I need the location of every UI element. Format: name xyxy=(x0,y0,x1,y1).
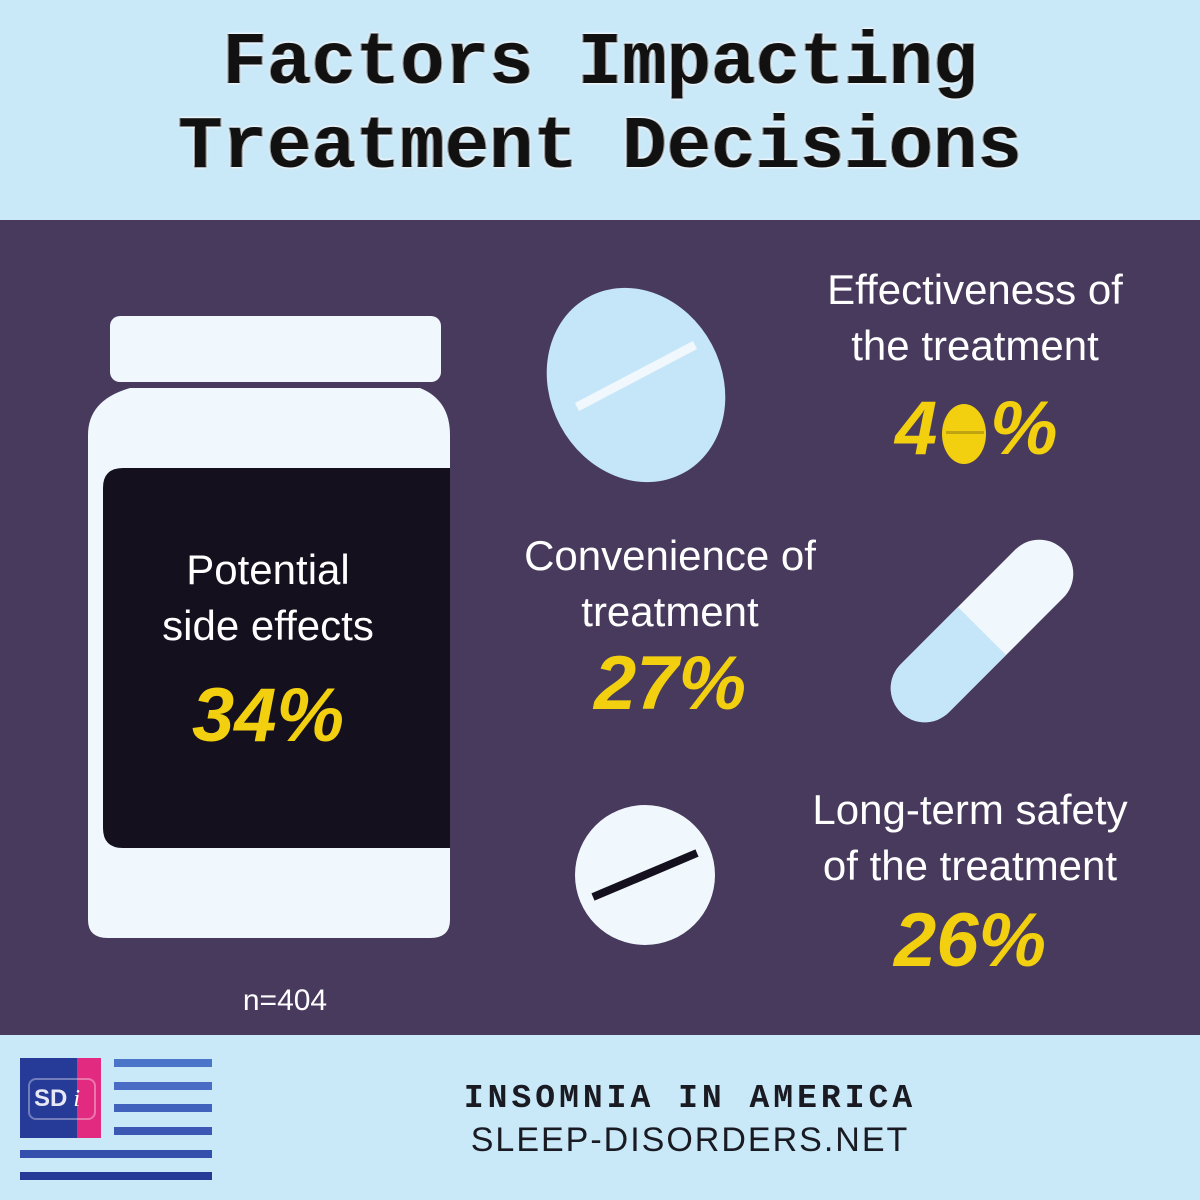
text: effectiveness: the treatment xyxy=(851,322,1099,369)
text: convenience: treatment xyxy=(581,588,759,635)
stat: 40%: % xyxy=(990,386,1058,471)
stat: 26%: 26% xyxy=(894,898,1046,983)
logo: SDi xyxy=(34,1085,80,1112)
text: n=404: n=404 xyxy=(243,984,327,1017)
title xyxy=(178,22,1022,190)
panel: main xyxy=(0,220,1200,1035)
stat: 27%: 27% xyxy=(594,641,746,726)
text: long-term: Long-term safety xyxy=(812,786,1128,833)
title: Factors Impacting xyxy=(223,22,977,106)
text: convenience xyxy=(524,532,816,635)
text: convenience: Convenience of xyxy=(524,532,816,579)
text: long-term: of the treatment xyxy=(823,842,1117,889)
text: long-term xyxy=(812,786,1128,889)
stat: 40% xyxy=(894,386,1058,471)
footer text: SLEEP-DISORDERS.NET xyxy=(471,1121,909,1159)
text: effectiveness xyxy=(827,266,1123,369)
text: effectiveness: Effectiveness of xyxy=(827,266,1123,313)
icon: capsule xyxy=(877,526,1087,736)
logo xyxy=(20,1058,212,1180)
footer text xyxy=(464,1080,916,1159)
title: Treatment Decisions xyxy=(178,106,1022,190)
icon: bottle xyxy=(88,316,450,938)
text: side effects: Potential xyxy=(186,546,350,593)
stat: 40%: 4 xyxy=(895,386,937,471)
footer text: INSOMNIA IN AMERICA xyxy=(464,1080,916,1117)
stat: 34%: 34% xyxy=(192,673,344,758)
icon: oval pill xyxy=(513,256,759,514)
icon: round pill xyxy=(575,805,715,945)
text: side effects xyxy=(162,546,374,649)
text: side effects: side effects xyxy=(162,602,374,649)
